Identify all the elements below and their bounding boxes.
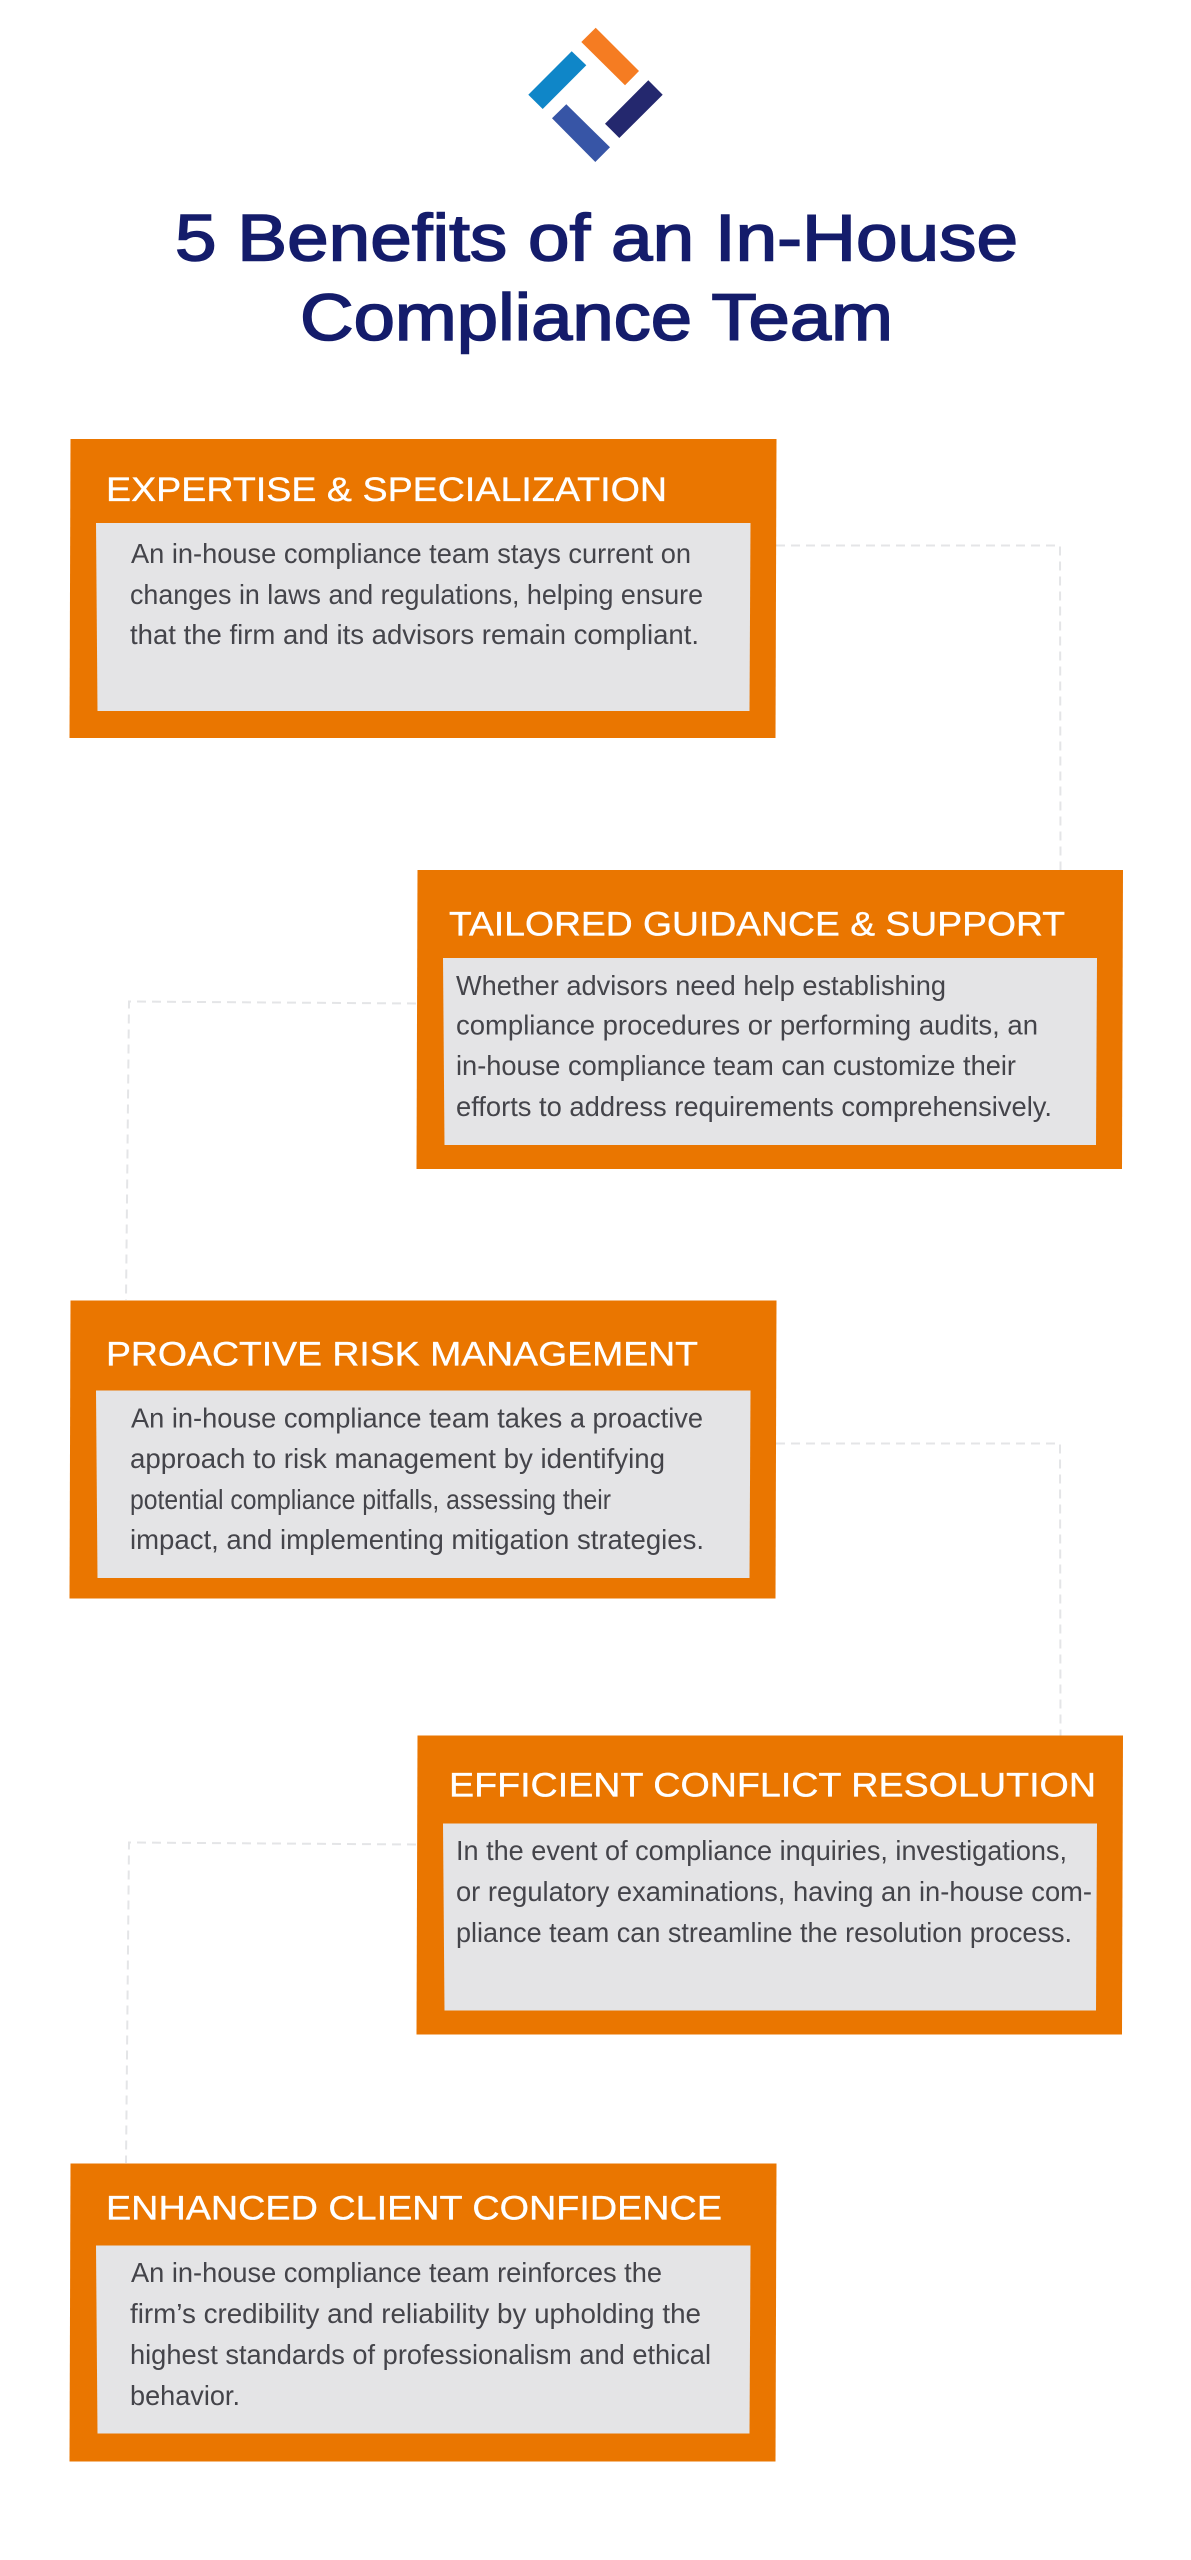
text block: expertise body: that the firm and its advisors remain compliant. (130, 619, 699, 650)
icon: diamond logo (528, 28, 663, 162)
heading: proactive risk management: PROACTIVE RISK MANAGEMENT (106, 1336, 698, 1374)
heading: efficient conflict resolution: EFFICIENT CONFLICT RESOLUTION (449, 1766, 1096, 1804)
panel: enhanced client confidence (70, 2164, 776, 2462)
text block: enhanced client body: highest standards of professionalism and ethical (130, 2339, 711, 2370)
title: Compliance Team (300, 280, 893, 354)
heading: enhanced client confidence: ENHANCED CLIENT CONFIDENCE (106, 2190, 722, 2228)
text block: enhanced client body: firm’s credibility and reliability by upholding the (130, 2298, 701, 2329)
text block: tailored guidance body: compliance procedures or performing audits, an (456, 1010, 1038, 1040)
text block: proactive risk body: An in-house compliance team takes a proactive (131, 1402, 703, 1434)
text block: proactive risk body: approach to risk management by identifying (130, 1443, 665, 1474)
title: 5 Benefits of an In-House (175, 200, 1018, 274)
text block: expertise body: changes in laws and regulations, helping ensure (130, 579, 703, 610)
text block: tailored guidance body (456, 970, 1052, 1122)
text block: expertise body: An in-house compliance team stays current on (131, 538, 691, 569)
text block: efficient conflict body: or regulatory examinations, having an in-house com- (456, 1876, 1092, 1907)
panel: expertise and specialization (70, 439, 776, 738)
text block: tailored guidance body: in-house compliance team can customize their (456, 1050, 1016, 1081)
title (175, 200, 1018, 354)
text block: proactive risk body: potential compliance pitfalls, assessing their (130, 1484, 611, 1515)
text block: tailored guidance body: efforts to address requirements comprehensively. (456, 1091, 1052, 1122)
panel: tailored guidance and support (416, 870, 1123, 1169)
heading: tailored guidance and support: TAILORED GUIDANCE & SUPPORT (449, 906, 1065, 944)
text block: proactive risk body: impact, and implementing mitigation strategies. (130, 1524, 704, 1555)
text block: enhanced client body: behavior. (130, 2380, 240, 2411)
text block: proactive risk body (130, 1402, 704, 1555)
panel: proactive risk management (70, 1300, 776, 1598)
text block: tailored guidance body: Whether advisors need help establishing (456, 970, 946, 1001)
text block: expertise body (130, 538, 703, 650)
heading: expertise and specialization: EXPERTISE & SPECIALIZATION (106, 471, 667, 509)
panel: efficient conflict resolution (416, 1736, 1123, 2034)
text block: efficient conflict body: In the event of compliance inquiries, investigations, (456, 1835, 1067, 1866)
text block: efficient conflict body: pliance team can streamline the resolution process. (456, 1917, 1072, 1948)
text block: enhanced client body: An in-house compliance team reinforces the (131, 2257, 662, 2288)
text block: efficient conflict body (456, 1835, 1092, 1948)
text block: enhanced client body (130, 2257, 711, 2411)
